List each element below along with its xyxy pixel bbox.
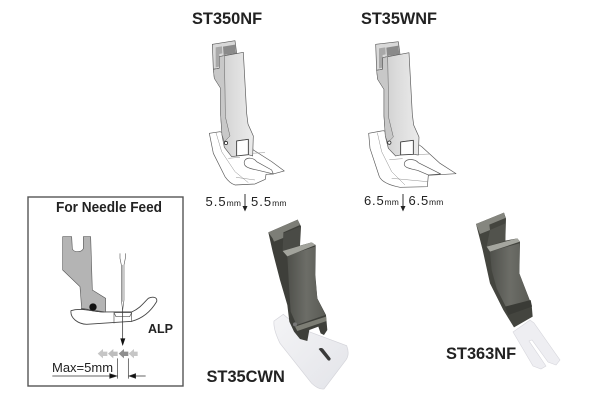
dimension lines (52, 358, 146, 379)
panel heading: For Needle Feed (56, 200, 162, 216)
illustration: ST35WNF presser foot (369, 42, 456, 187)
title: ST35WNF: ST35WNF (361, 10, 437, 28)
measurement: 5.5mm needle gauge: 5.5mm (206, 194, 241, 209)
diagram: foot and needle (63, 237, 157, 346)
white prongs (513, 320, 560, 369)
photo: ST363NF presser foot (476, 213, 560, 369)
label: Max=5mm: Max=5mm (52, 360, 113, 375)
measurement: 5.5mm needle gauge (206, 194, 287, 212)
illustration: ST350NF presser foot (209, 41, 284, 185)
photo: ST35CWN presser foot (268, 220, 348, 389)
label: ST35CWN: ST35CWN (206, 368, 285, 386)
measurement: 6.5mm needle gauge: 6.5mm (408, 193, 444, 208)
label: ST363NF: ST363NF (446, 345, 516, 363)
panel: For Needle Feed (28, 197, 183, 386)
measurement: 6.5mm needle gauge: 6.5mm (364, 193, 399, 208)
title: ST350NF: ST350NF (192, 10, 262, 28)
measurement: 6.5mm needle gauge (364, 193, 444, 212)
measurement: 5.5mm needle gauge: 5.5mm (251, 194, 287, 209)
feed direction arrows (98, 349, 138, 358)
label: ALP: ALP (148, 322, 173, 336)
metal shank (476, 213, 533, 327)
